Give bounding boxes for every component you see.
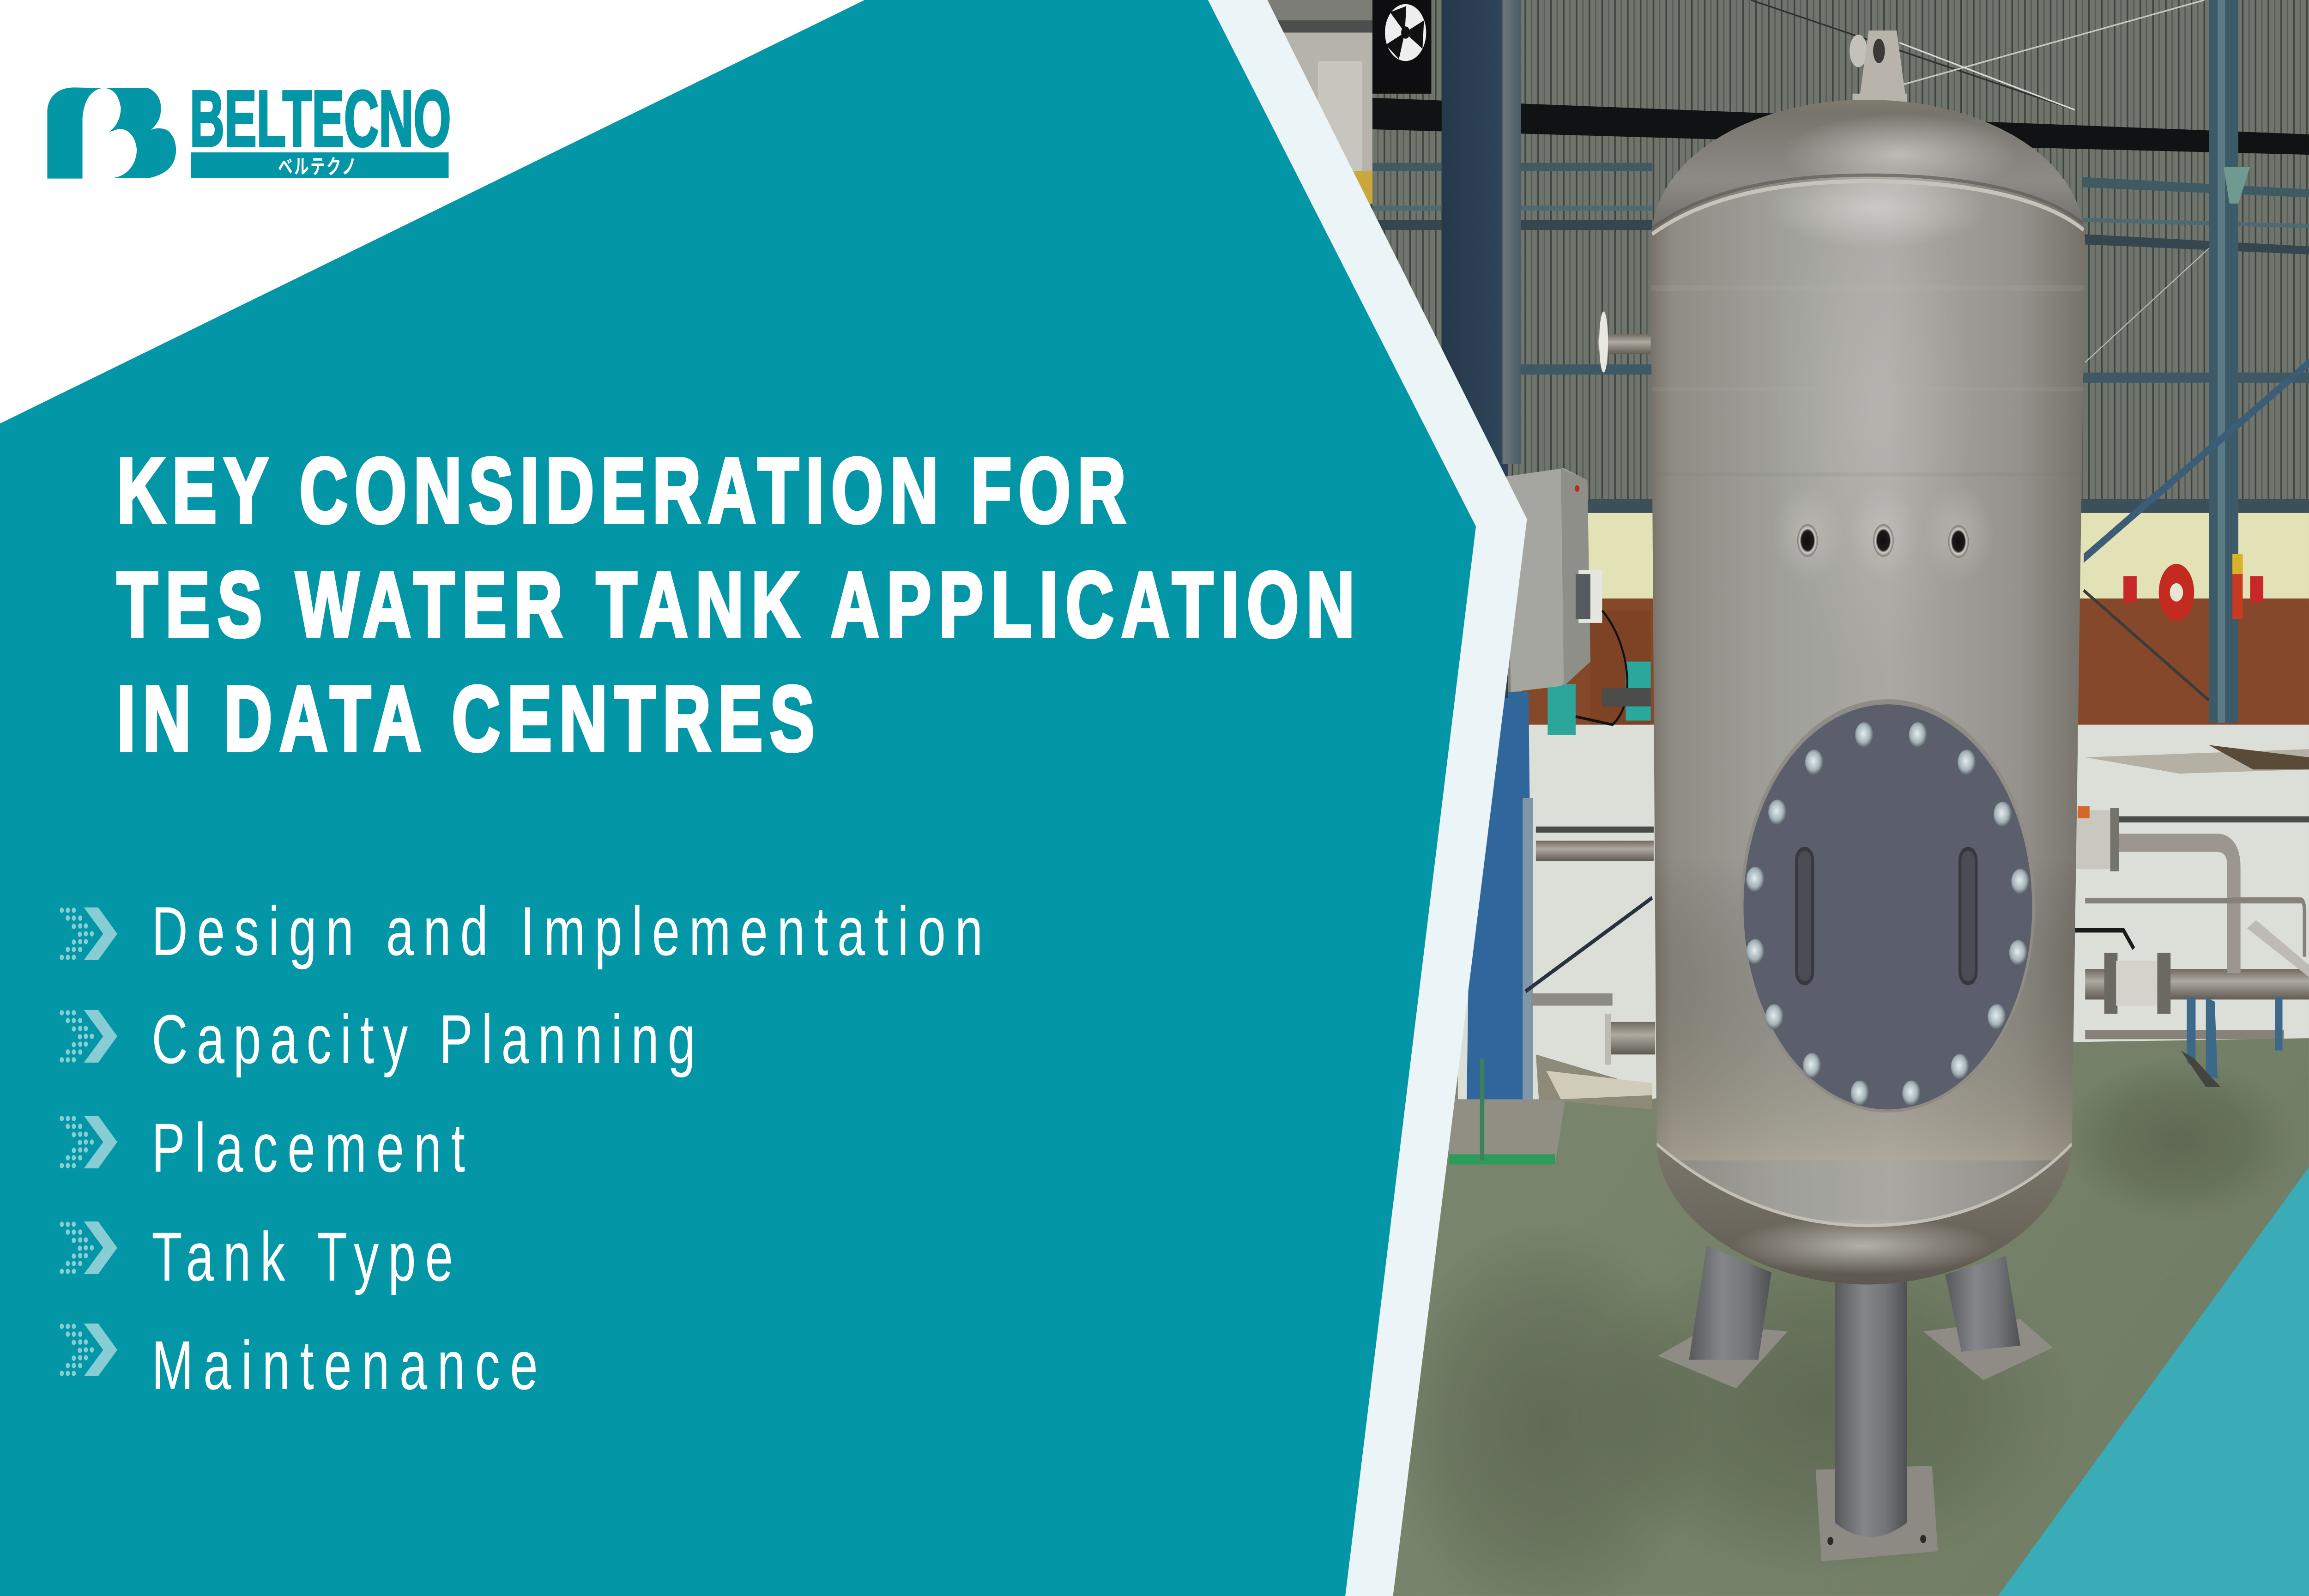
main teal panel	[0, 0, 1476, 1596]
tank support leg: left	[1658, 1246, 1788, 1388]
logo: Beltecno	[47, 74, 451, 179]
white logo corner	[0, 0, 864, 423]
list item: Placement: Placement	[151, 1109, 465, 1186]
logo katakana bar: ベルテクノ	[278, 156, 357, 178]
title: IN DATA CENTRES	[117, 667, 815, 770]
photo: stainless steel TES water tank in factory	[1266, 0, 2309, 1596]
lifting lug on tank	[1850, 30, 1907, 102]
pipework and valves right of tank	[2073, 806, 2309, 1087]
fire safety equipment on wall	[2123, 554, 2263, 621]
pipework left of tank	[1526, 311, 1655, 1109]
logo symbol	[47, 87, 176, 179]
factory background wall and floor	[1266, 0, 2309, 1596]
distant silver vessel, top left	[1266, 0, 1372, 204]
logo wordmark: BELTECNO	[190, 74, 451, 163]
list item: Maintenance: Maintenance	[151, 1326, 538, 1404]
steel column, left	[1442, 0, 1566, 1164]
manway bolts	[1746, 722, 2030, 1106]
list item: Tank Type: Tank Type	[151, 1218, 453, 1295]
logo katakana bar	[191, 152, 448, 178]
list item: Design and Implementation: Design and Implementation	[151, 892, 983, 970]
tank support leg: right	[1923, 1256, 2053, 1380]
overhead black beam and horizontal purlins	[1266, 0, 2309, 383]
tank nozzles	[1797, 524, 1969, 558]
corner accent triangle, bottom right	[1998, 1167, 2309, 1596]
icon: wall ventilation fan	[1372, 0, 1431, 94]
tank support leg: centre	[1816, 1278, 1938, 1561]
title	[117, 439, 1354, 770]
list of considerations	[60, 892, 983, 1404]
green bins behind control box	[1547, 611, 1651, 735]
manway cover with bolts and handles	[1741, 699, 2035, 1112]
title: TES WATER TANK APPLICATION	[117, 553, 1354, 656]
steel column and diagonal brace, right	[2084, 0, 2309, 723]
pale separator band	[1207, 0, 1527, 1596]
list item: Capacity Planning: Capacity Planning	[151, 1000, 695, 1078]
electrical control box	[1506, 468, 1627, 725]
vertical stainless steel tank	[1649, 81, 2091, 1303]
title: KEY CONSIDERATION FOR	[117, 439, 1126, 542]
manway handle left	[1796, 849, 1813, 983]
manway handle right	[1960, 849, 1976, 983]
